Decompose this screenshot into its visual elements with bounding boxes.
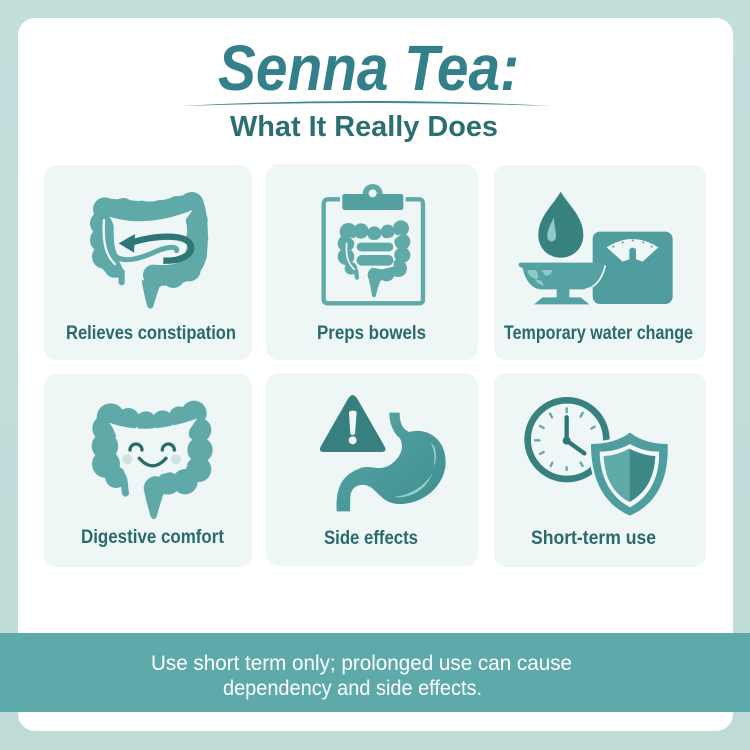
- label: Relieves constipation: [66, 323, 236, 344]
- panel: temporary water change: [494, 165, 706, 360]
- icon: stomach: [337, 413, 446, 511]
- subtitle: What It Really Does: [230, 111, 498, 143]
- title: Senna Tea:: [218, 32, 519, 104]
- panel: short-term use: [494, 373, 706, 567]
- title underline: [180, 101, 552, 106]
- icon: shield: [588, 430, 670, 518]
- banner text: dependency and side effects.: [223, 677, 482, 700]
- icon: smiling colon: [92, 401, 213, 519]
- panel: relieves constipation: [44, 165, 252, 360]
- panel: side effects: [266, 373, 478, 566]
- label: Temporary water change: [504, 323, 693, 344]
- label: Side effects: [324, 528, 418, 549]
- label: Preps bowels: [317, 323, 426, 344]
- icon: clipboard with colon: [324, 184, 423, 303]
- icon: clock: [528, 400, 606, 479]
- banner: [0, 633, 750, 712]
- icon: warning triangle: [320, 395, 385, 452]
- icon: colon with arrow: [90, 192, 208, 309]
- panel: preps bowels: [266, 164, 478, 360]
- label: Digestive comfort: [81, 527, 225, 548]
- icon: water drop, bowl and scale: [519, 192, 673, 304]
- banner text: Use short term only; prolonged use can cause: [151, 652, 572, 675]
- label: Short-term use: [531, 528, 656, 549]
- panel: digestive comfort: [44, 374, 252, 567]
- banner text: [151, 652, 572, 700]
